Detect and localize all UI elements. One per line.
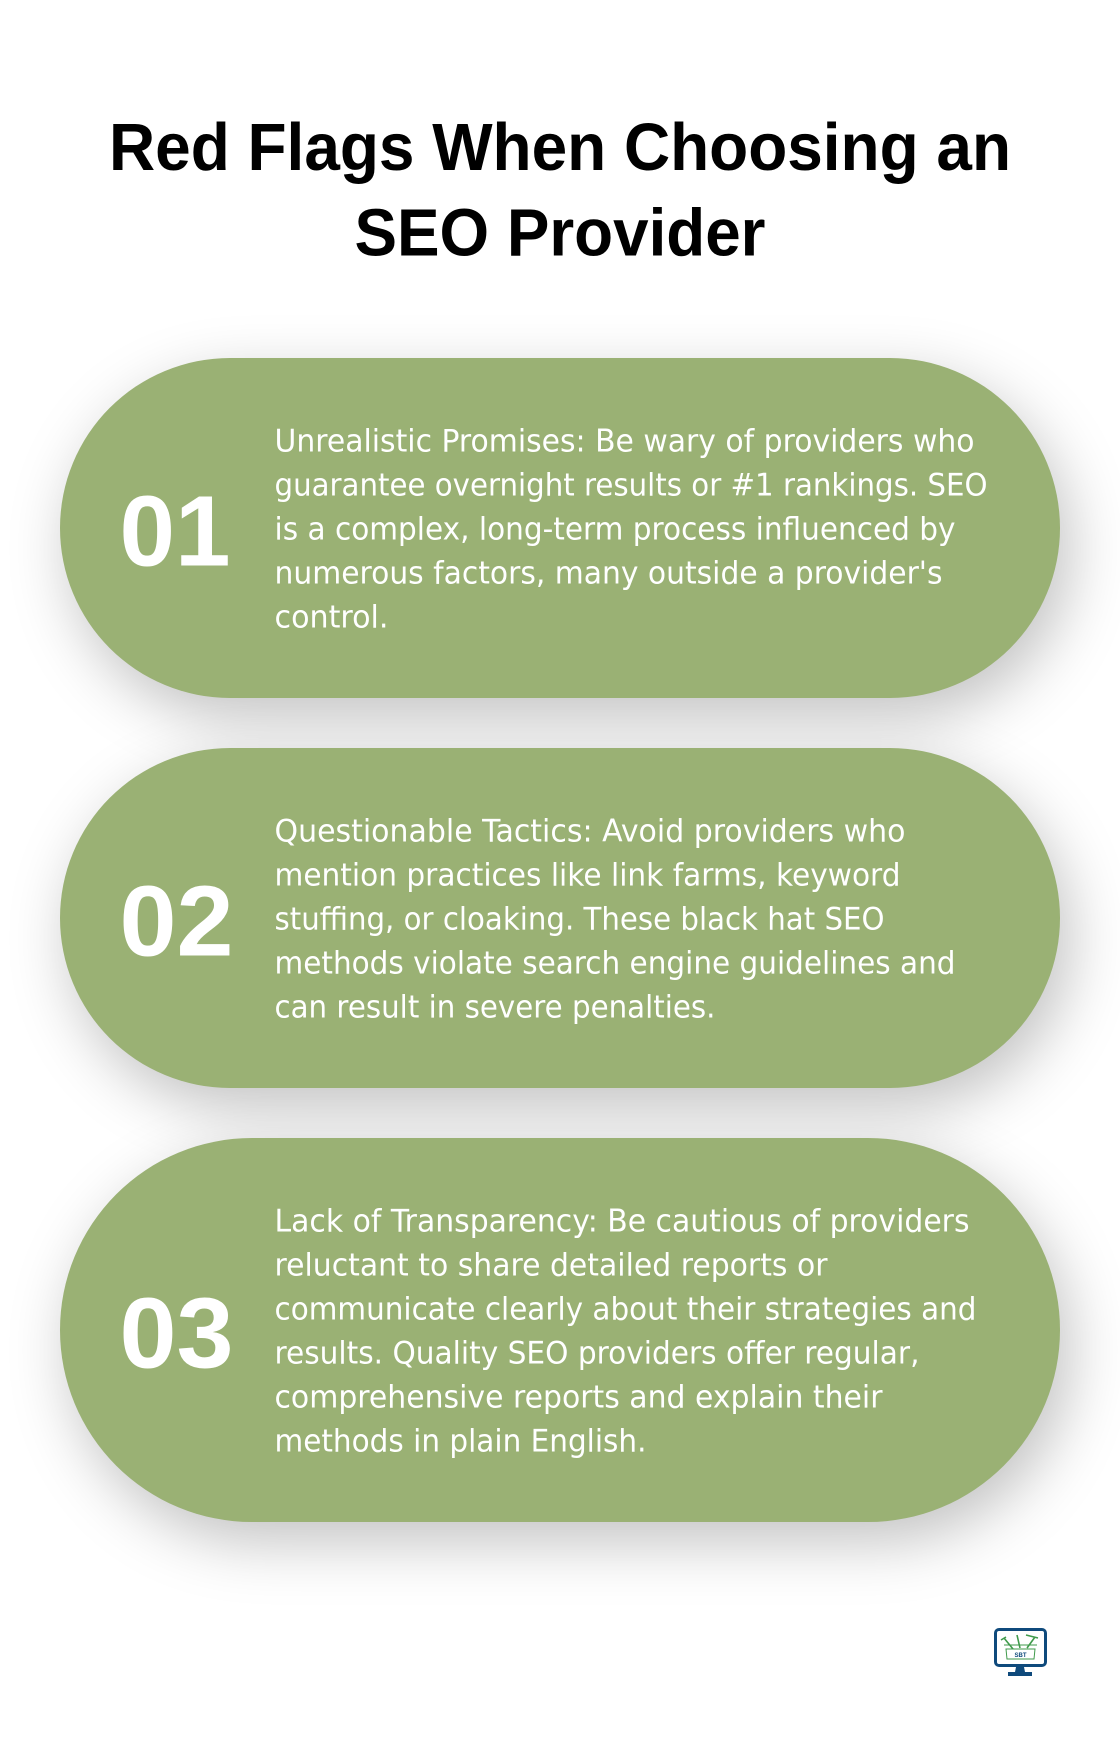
text block 3 xyxy=(274,1203,976,1459)
text block 3: reluctant to share detailed reports or xyxy=(274,1247,828,1283)
text block 2: stuffing, or cloaking. These black hat SEO xyxy=(274,901,884,937)
number 01: 01 xyxy=(120,476,230,588)
text block 2 xyxy=(274,813,956,1025)
text block 2: can result in severe penalties. xyxy=(274,989,716,1025)
text block 1: control. xyxy=(274,599,388,635)
icon: SBT toolbox on monitor logo xyxy=(996,1630,1046,1676)
icon: SBT toolbox on monitor logo: SBT xyxy=(1014,1653,1027,1659)
text block 1: Unrealistic Promises: Be wary of providers who xyxy=(274,423,974,459)
text block 2: Questionable Tactics: Avoid providers who xyxy=(274,813,906,849)
text block 2: methods violate search engine guidelines and xyxy=(274,945,956,981)
number 03: 03 xyxy=(120,1278,234,1390)
panel: lack of transparency xyxy=(60,1138,1060,1522)
title: SEO Provider xyxy=(354,196,766,270)
number 02: 02 xyxy=(120,866,234,978)
text block 1: numerous factors, many outside a provider's xyxy=(274,555,942,591)
text block 3: methods in plain English. xyxy=(274,1423,646,1459)
text block 1: is a complex, long-term process influenced by xyxy=(274,511,956,547)
text block 3: communicate clearly about their strategies and xyxy=(274,1291,976,1327)
title: Red Flags When Choosing an xyxy=(109,111,1011,185)
text block 3: comprehensive reports and explain their xyxy=(274,1379,883,1415)
pill background 3 xyxy=(60,1138,1060,1522)
panel: unrealistic promises xyxy=(60,358,1060,698)
text block 3: Lack of Transparency: Be cautious of providers xyxy=(274,1203,970,1239)
title xyxy=(109,111,1011,270)
panel: questionable tactics xyxy=(60,748,1060,1088)
pill background 1 xyxy=(60,358,1060,698)
text block 1: guarantee overnight results or #1 rankings. SEO xyxy=(274,467,988,503)
text block 1 xyxy=(274,423,988,635)
text block 2: mention practices like link farms, keyword xyxy=(274,857,900,893)
pill background 2 xyxy=(60,748,1060,1088)
text block 3: results. Quality SEO providers offer regular, xyxy=(274,1335,920,1371)
